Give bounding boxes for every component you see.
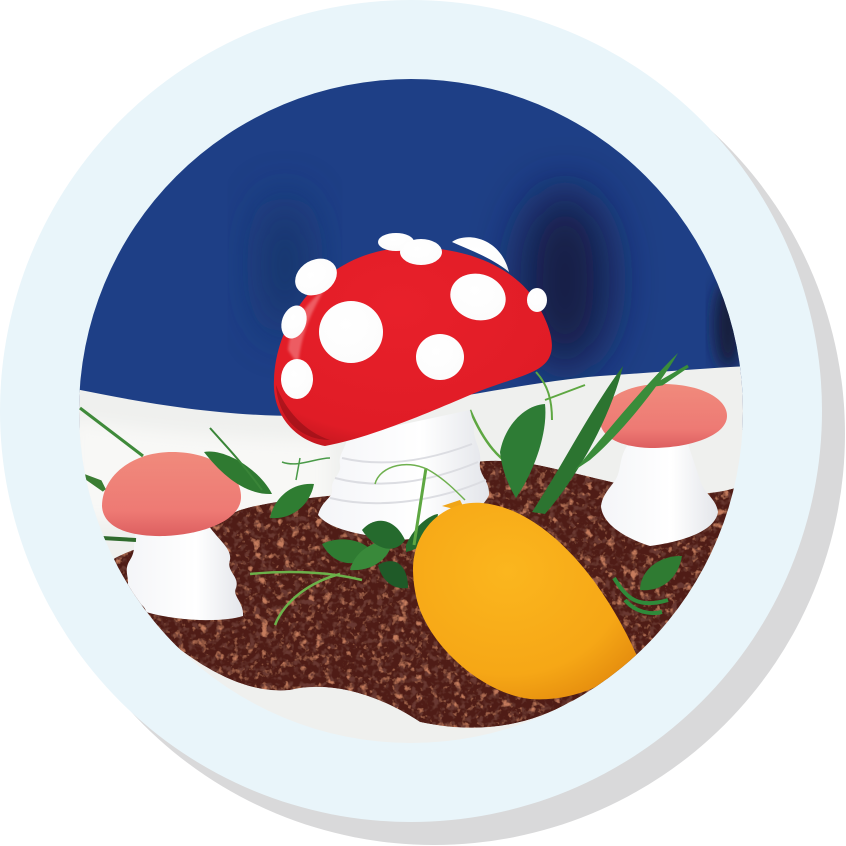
meringue stem [601,444,718,546]
pink cap [102,452,241,536]
photo: mushroom dessert plate [70,70,760,760]
mango quenelle [413,500,637,699]
left small mushroom [102,452,243,620]
red cap [274,248,552,446]
pink cap [600,384,727,448]
large mushroom [274,233,552,540]
right small mushroom [600,384,727,546]
crumb soil [112,461,735,728]
navy background [70,70,760,430]
meringue stem [126,522,243,620]
white spots [277,233,547,399]
front pea shoots [250,465,682,625]
pea shoots [80,353,688,540]
large meringue stem [318,410,489,540]
white plate [70,366,750,760]
